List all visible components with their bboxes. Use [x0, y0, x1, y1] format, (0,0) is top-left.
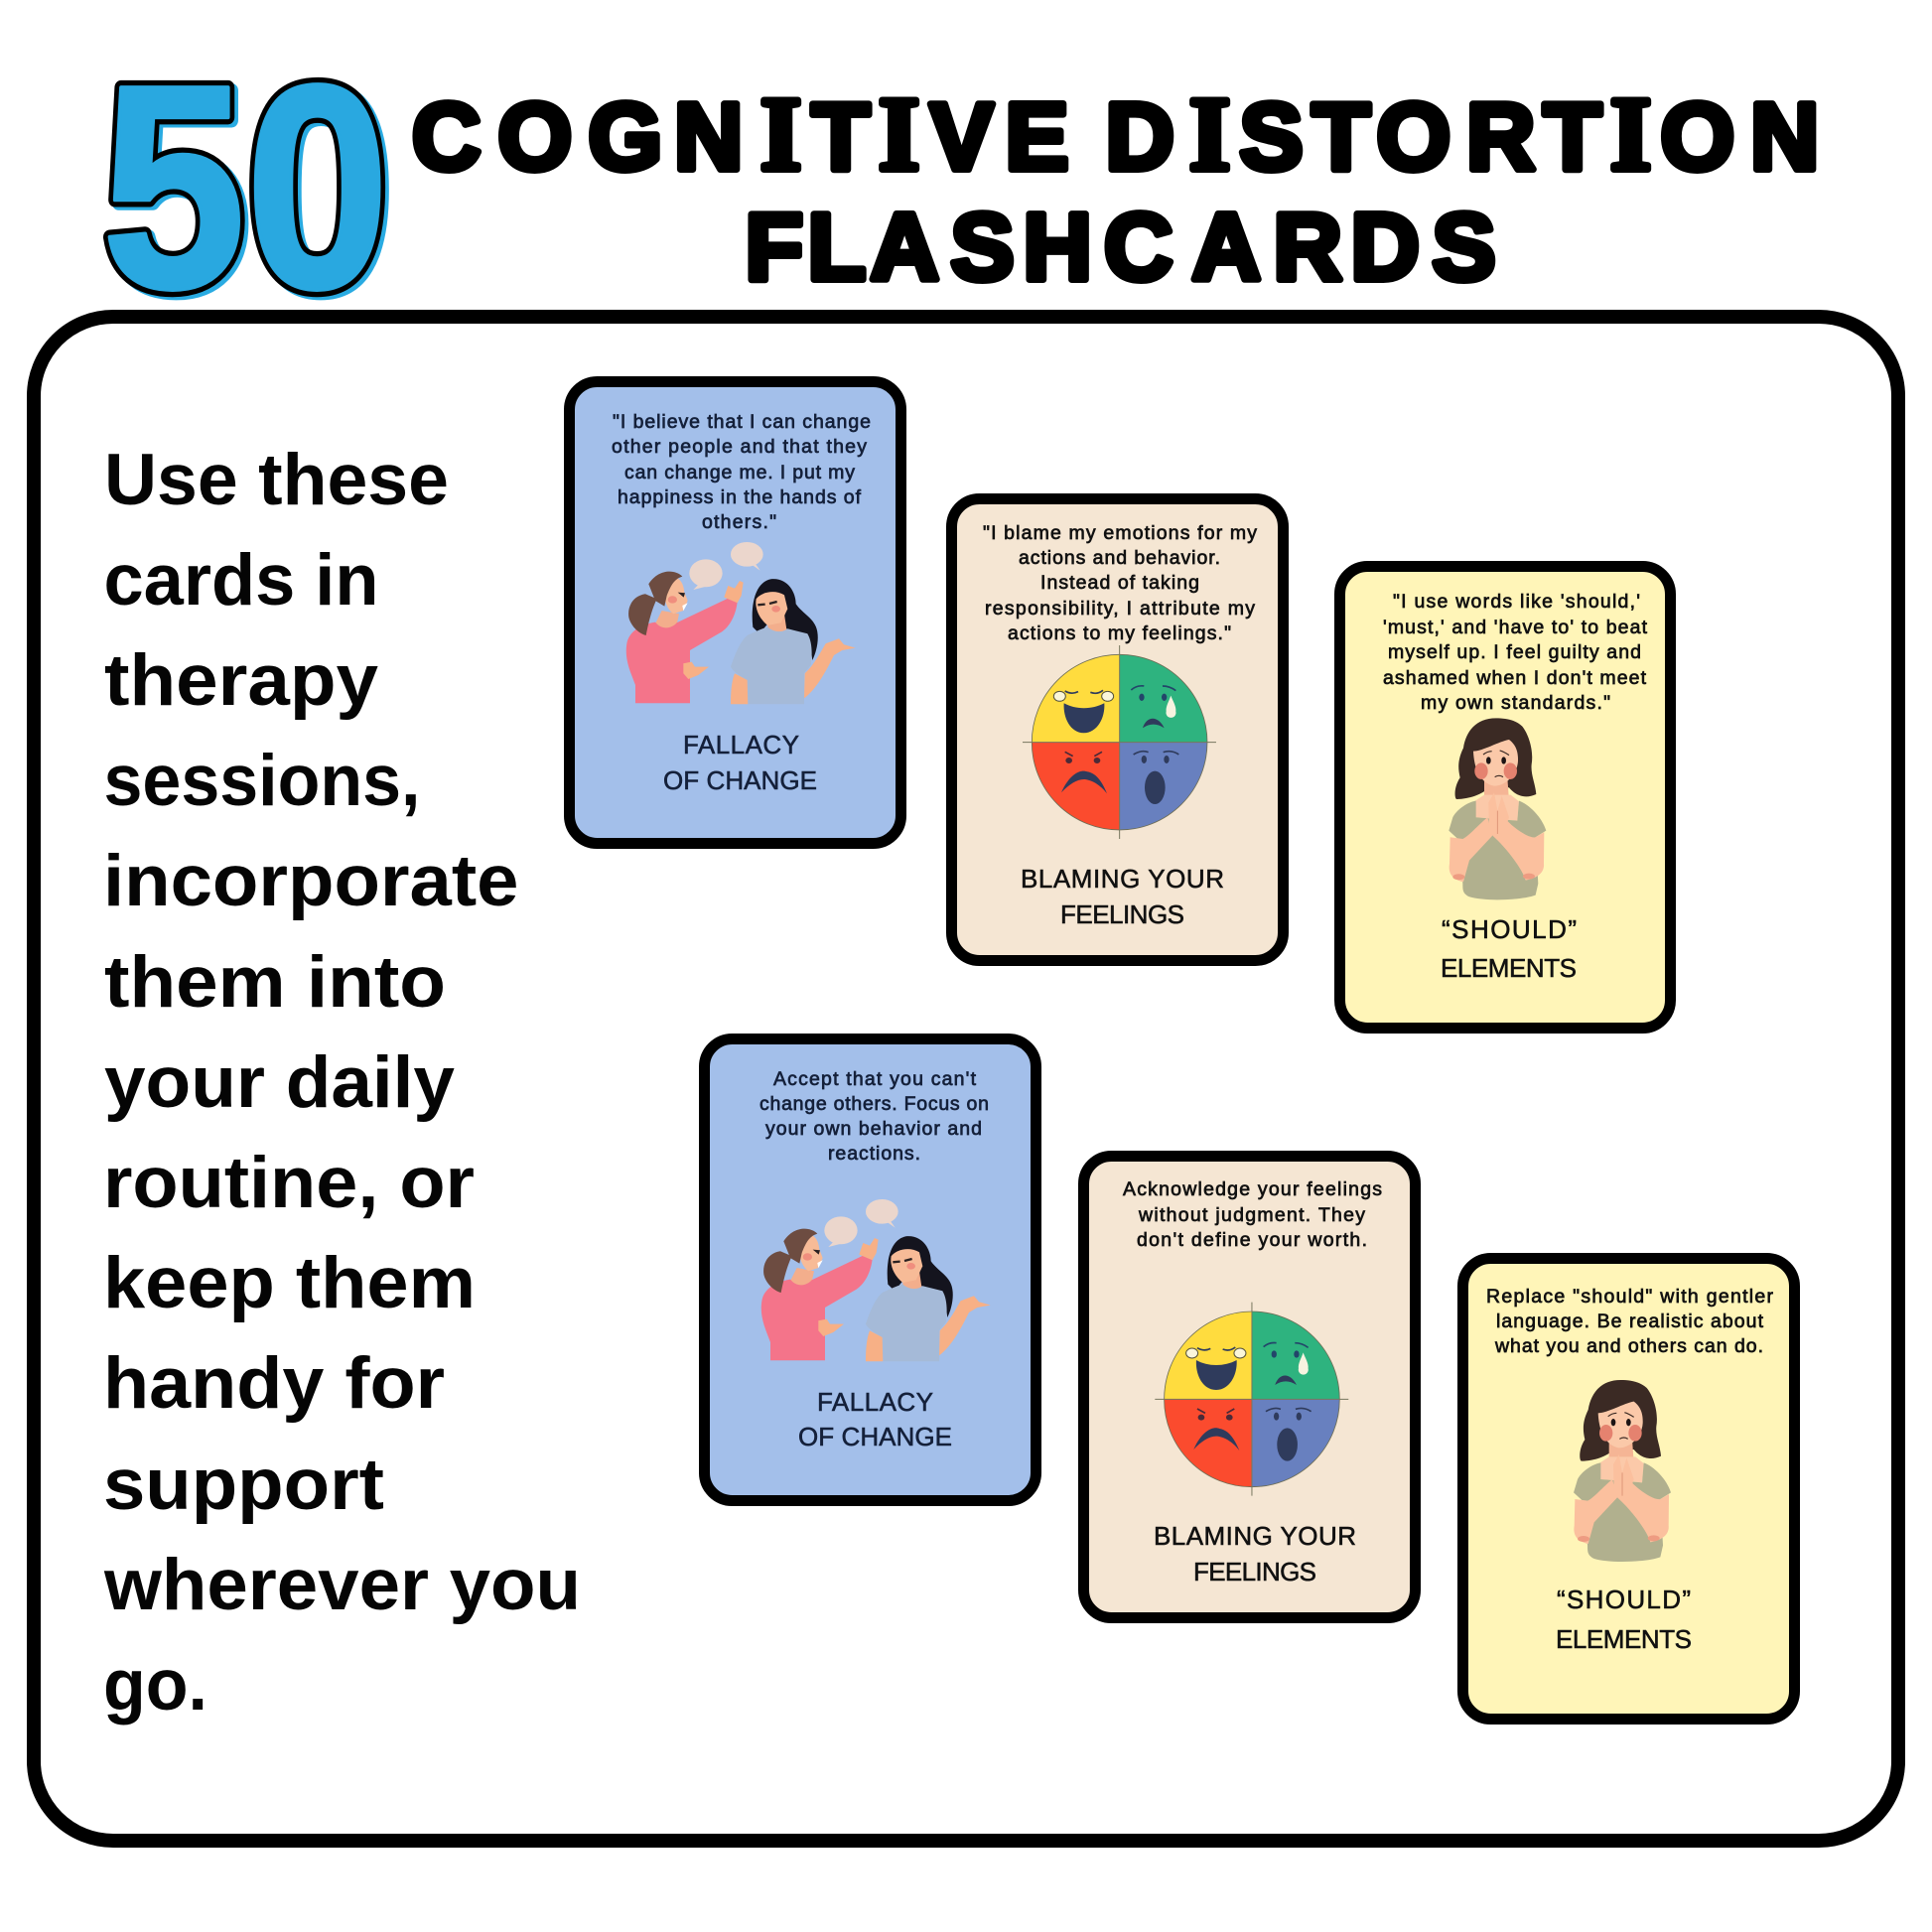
card title: FALLACY	[817, 1387, 933, 1417]
card quote text: myself up. I feel guilty and	[1388, 641, 1641, 663]
title: Cognitive Distortion Flashcards: FLASHCARDS	[745, 195, 1496, 300]
left description text	[103, 440, 581, 1725]
card advice text	[1123, 1178, 1382, 1251]
illustration: emotion wheel	[1023, 645, 1216, 839]
card title: BLAMING YOUR	[1154, 1521, 1356, 1551]
title: Cognitive Distortion Flashcards: T	[1543, 83, 1601, 191]
card quote text: my own standards."	[1421, 692, 1610, 714]
card quote text: Instead of taking	[1040, 572, 1199, 594]
panel: flashcard fallacy of change (front)	[570, 381, 901, 844]
card title: OF CHANGE	[663, 765, 817, 795]
card title: BLAMING YOUR	[1021, 864, 1224, 894]
card quote text: "I blame my emotions for my	[983, 522, 1257, 544]
heading number: 50: 50	[101, 25, 389, 348]
illustration: worried woman with clasped hands	[1574, 1380, 1671, 1562]
left description text: your daily	[104, 1042, 455, 1123]
card quote text	[1383, 591, 1648, 714]
title: Cognitive Distortion Flashcards: ON	[1660, 83, 1819, 191]
left description text: them into	[104, 942, 446, 1023]
card frame	[1084, 1156, 1416, 1618]
left description text: cards in	[103, 540, 379, 621]
card title	[1556, 1585, 1692, 1654]
card quote text	[612, 411, 871, 533]
left description text: go.	[103, 1645, 207, 1725]
card advice text	[1486, 1286, 1773, 1357]
panel: flashcard should elements (back)	[1463, 1259, 1795, 1720]
heading number: 50: 50	[101, 25, 389, 348]
card title	[798, 1387, 952, 1451]
heading number: 50: 50	[105, 28, 393, 351]
card title: “SHOULD”	[1442, 914, 1577, 944]
card title	[1154, 1521, 1356, 1587]
title: Cognitive Distortion Flashcards	[412, 75, 1819, 300]
card advice text: your own behavior and	[765, 1118, 982, 1140]
card title: “SHOULD”	[1557, 1585, 1691, 1614]
title: Cognitive Distortion Flashcards: I	[879, 75, 919, 193]
illustration: two women talking	[626, 542, 856, 704]
card quote text: ashamed when I don't meet	[1383, 667, 1647, 689]
card advice text: don't define your worth.	[1137, 1229, 1367, 1251]
title: Cognitive Distortion Flashcards: I	[1189, 75, 1230, 193]
panel: flashcard fallacy of change (back)	[705, 1038, 1036, 1501]
title: Cognitive Distortion Flashcards: D	[1106, 83, 1174, 191]
card quote text: actions to my feelings."	[1008, 622, 1231, 644]
card title	[1441, 914, 1577, 983]
title: Cognitive Distortion Flashcards: STOR	[1239, 83, 1535, 191]
card quote text: 'must,' and 'have to' to beat	[1383, 617, 1648, 638]
illustration: worried woman with clasped hands	[1449, 718, 1546, 899]
title: Cognitive Distortion Flashcards: I	[1610, 75, 1651, 193]
card frame	[705, 1038, 1036, 1501]
card advice text: what you and others can do.	[1494, 1335, 1763, 1357]
left description text: routine, or	[103, 1143, 475, 1223]
left description text: wherever you	[103, 1545, 581, 1625]
card quote text: "I use words like 'should,'	[1393, 591, 1640, 613]
card advice text: without judgment. They	[1138, 1204, 1365, 1226]
card quote text: happiness in the hands of	[618, 486, 862, 508]
card frame	[570, 381, 901, 844]
card title: OF CHANGE	[798, 1422, 952, 1451]
card quote text: other people and that they	[612, 436, 867, 458]
card advice text: change others. Focus on	[759, 1093, 989, 1115]
card title: FEELINGS	[1193, 1557, 1316, 1587]
panel: flashcard blaming your feelings (back)	[1084, 1156, 1416, 1618]
card advice text: Acknowledge your feelings	[1123, 1178, 1382, 1200]
left description text: handy for	[103, 1343, 445, 1424]
card advice text: reactions.	[828, 1143, 920, 1165]
card frame	[1463, 1259, 1795, 1720]
card title: ELEMENTS	[1556, 1624, 1692, 1654]
card quote text: can change me. I put my	[624, 462, 855, 483]
title: Cognitive Distortion Flashcards: I	[760, 75, 801, 193]
card quote text: others."	[702, 511, 776, 533]
card title	[1021, 864, 1224, 929]
left description text: keep them	[103, 1243, 476, 1323]
card advice text: Accept that you can't	[773, 1068, 977, 1090]
panel: flashcard blaming your feelings (front)	[951, 498, 1283, 961]
illustration: emotion wheel	[1155, 1303, 1348, 1496]
card frame	[1340, 566, 1670, 1029]
left description text: sessions,	[103, 741, 421, 821]
card title: ELEMENTS	[1441, 953, 1577, 983]
title: Cognitive Distortion Flashcards: VE	[929, 83, 1069, 191]
card advice text: Replace "should" with gentler	[1486, 1286, 1773, 1308]
card title: FEELINGS	[1060, 899, 1184, 929]
card quote text: "I believe that I can change	[613, 411, 871, 433]
left description text: Use these	[104, 440, 449, 520]
card quote text: actions and behavior.	[1019, 547, 1220, 569]
card frame	[951, 498, 1283, 961]
card quote text: responsibility, I attribute my	[985, 598, 1255, 620]
left description text: incorporate	[103, 841, 518, 921]
title: Cognitive Distortion Flashcards: COGN	[412, 83, 743, 191]
card advice text	[759, 1068, 989, 1165]
main panel outline	[34, 317, 1898, 1841]
panel: flashcard should elements (front)	[1340, 566, 1670, 1029]
illustration: two women talking	[761, 1199, 991, 1361]
card title: FALLACY	[683, 730, 799, 759]
title: Cognitive Distortion Flashcards: T	[812, 83, 870, 191]
left description text: support	[103, 1445, 384, 1525]
card advice text: language. Be realistic about	[1496, 1311, 1764, 1332]
left description text: therapy	[104, 640, 378, 721]
card title	[663, 730, 817, 795]
card quote text	[983, 522, 1257, 644]
